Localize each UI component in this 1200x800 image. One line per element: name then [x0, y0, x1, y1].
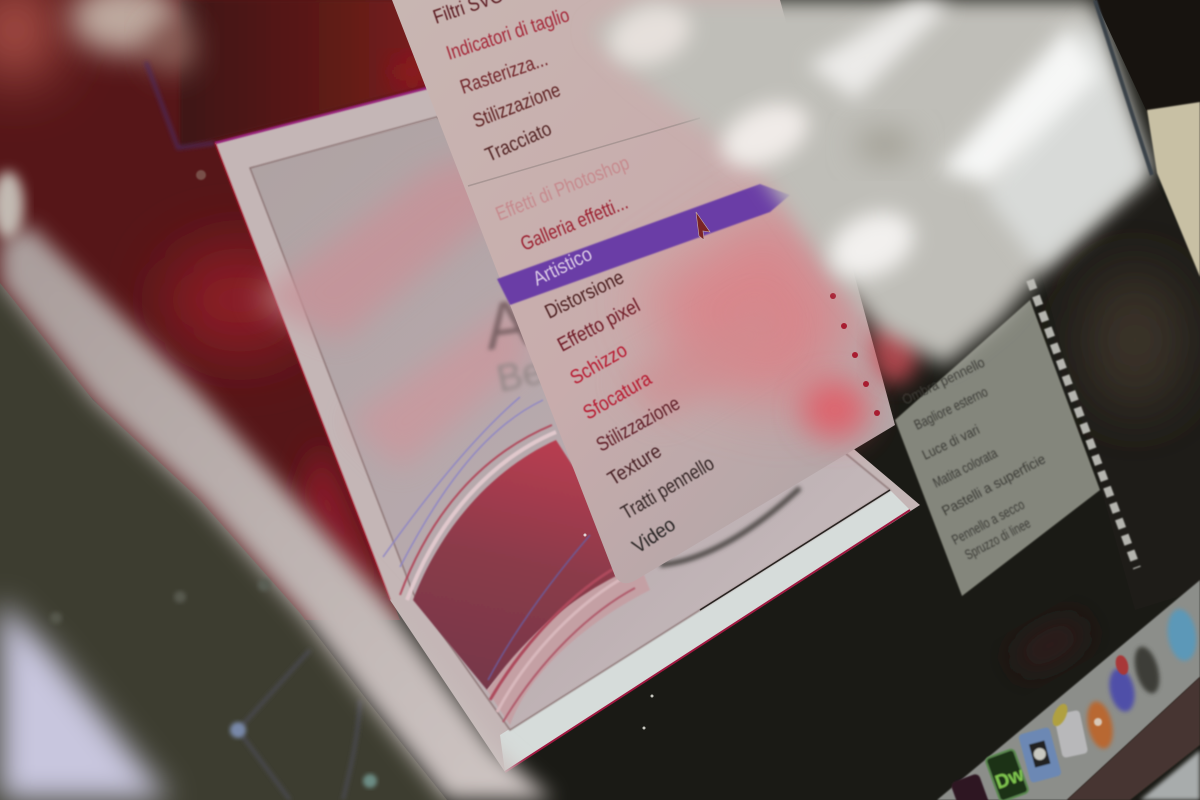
dotted scroll strip — [1030, 280, 1137, 568]
menu item labels: Video — [628, 514, 680, 558]
menu item labels: Stilizzazione — [593, 393, 684, 456]
artboard card — [215, 88, 920, 772]
icon: mouse cursor — [696, 212, 710, 240]
grey secondary menu: Spruzzo di linee — [962, 515, 1033, 563]
menu item labels: Effetto pixel — [554, 295, 644, 356]
icon: preview app — [1018, 727, 1062, 783]
grey secondary menu: Ombra pennello — [899, 354, 987, 408]
icon: Dreamweaver: Dw — [993, 764, 1027, 794]
icon: dark app — [950, 773, 990, 800]
dock with application icons — [937, 580, 1200, 800]
menu item labels: Galleria effetti... — [517, 192, 631, 256]
menu item labels: Rasterizza... — [457, 48, 551, 99]
submenu arrows — [830, 293, 880, 416]
right edge wall and laptop bezel — [1095, 0, 1200, 277]
icon: blue app — [1165, 607, 1199, 663]
icon: dark app right — [1130, 644, 1164, 696]
artwork title fragments: Be — [493, 350, 547, 401]
icon: notes app — [1054, 710, 1088, 758]
dust specks — [50, 170, 654, 788]
red swoosh artwork on card — [383, 397, 800, 725]
menu item labels: Tratti pennello — [617, 453, 718, 524]
menu item labels: Artistico — [530, 243, 596, 290]
highlighted menu row — [497, 184, 790, 305]
grey secondary menu: Bagliore esterno — [911, 383, 990, 433]
blurred foreground white reflections — [590, 0, 1150, 365]
faint artwork lines in dark area — [238, 650, 360, 800]
pink light streaks on card — [255, 150, 530, 470]
icon: orange app — [1083, 699, 1117, 751]
pale window corner lower left — [0, 600, 170, 800]
menu item labels: Distorsione — [542, 266, 628, 323]
grey secondary menu — [895, 300, 1100, 596]
menu item labels: Tracciato — [482, 118, 555, 167]
dark right panel tone — [1007, 180, 1200, 679]
grey secondary menu: Pastelli a superficie — [939, 450, 1048, 519]
menu item labels: Texture — [604, 440, 666, 490]
dark olive area lower left — [0, 283, 447, 800]
blurred foreground diagonal window frame — [0, 171, 553, 800]
menu item labels: Sfocatura — [580, 367, 656, 424]
menu item labels: Schizzo — [566, 339, 631, 389]
icon: browser globe — [1106, 666, 1138, 714]
artwork title fragments: A — [480, 284, 534, 364]
menu item labels — [430, 0, 718, 558]
artwork title fragments — [480, 284, 547, 401]
grey secondary menu: Matita colorata — [930, 445, 1000, 491]
red artwork background — [0, 0, 440, 620]
menu item labels: Effetti di Photoshop — [493, 152, 633, 226]
photoshop effects dropdown menu — [392, 0, 919, 583]
icon: Dreamweaver — [985, 748, 1030, 800]
menu item labels: Stilizzazione — [470, 79, 564, 133]
grey secondary menu: Luce di vari — [919, 421, 982, 463]
grey secondary menu: Pennello a secco — [949, 496, 1027, 548]
